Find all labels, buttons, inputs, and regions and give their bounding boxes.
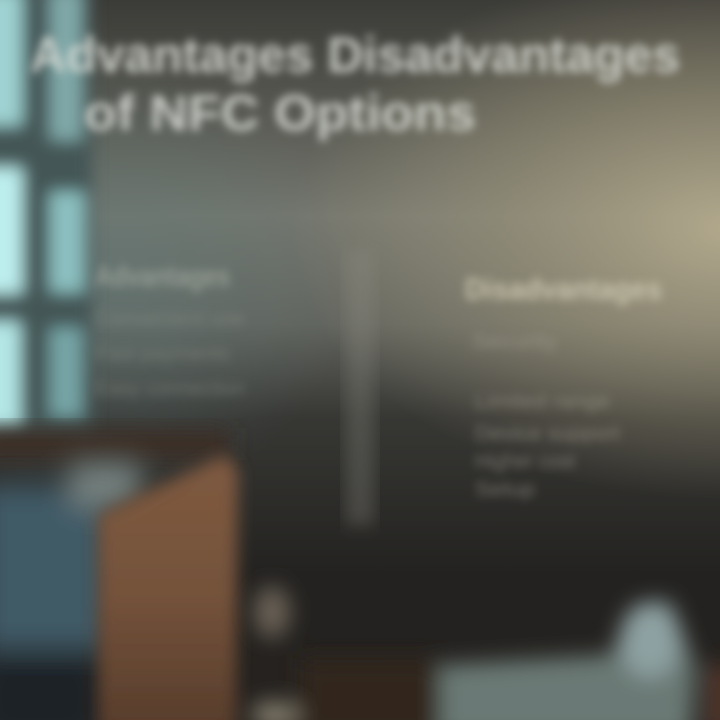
- warm light glow: [290, 0, 720, 500]
- wooden panel: [98, 455, 238, 720]
- window: [0, 0, 92, 440]
- right list: Limited range: [475, 391, 610, 413]
- left heading: Advantages: [95, 260, 230, 293]
- left list: Fast payments: [95, 343, 230, 365]
- right heading: Disadvantages: [465, 273, 662, 306]
- left list: Easy connection: [95, 378, 245, 400]
- blue cabinet: [0, 462, 140, 720]
- title: Advantages Disadvantages: [30, 27, 680, 83]
- window pane: top right: [50, 0, 82, 140]
- title: [30, 27, 680, 141]
- left list: [95, 308, 245, 400]
- dark brown base: [300, 660, 440, 720]
- sofa highlight: [620, 602, 680, 678]
- column divider: [346, 250, 374, 525]
- left list: Convenient use: [95, 308, 245, 330]
- window pane: lower right: [50, 328, 82, 416]
- title: of NFC Options: [84, 85, 476, 141]
- window pane: middle left: [0, 168, 22, 293]
- round ornament: [254, 586, 290, 638]
- right list: Setup: [475, 479, 535, 501]
- window pane: top left: [0, 0, 22, 125]
- window pane: lower left: [0, 322, 20, 427]
- right list: [472, 331, 620, 501]
- brown corner: [705, 665, 720, 720]
- right list: Security: [472, 331, 557, 353]
- left column: [95, 260, 245, 400]
- floor objects: [251, 586, 720, 720]
- window pane: middle right: [50, 192, 84, 292]
- right list: Higher cost: [475, 451, 575, 473]
- light sofa: [440, 600, 695, 720]
- right list: Device support: [475, 423, 620, 445]
- cool left light: [0, 60, 350, 500]
- right column: [465, 273, 662, 501]
- small lower ornament: [251, 702, 299, 720]
- shadow band under window: [0, 428, 230, 460]
